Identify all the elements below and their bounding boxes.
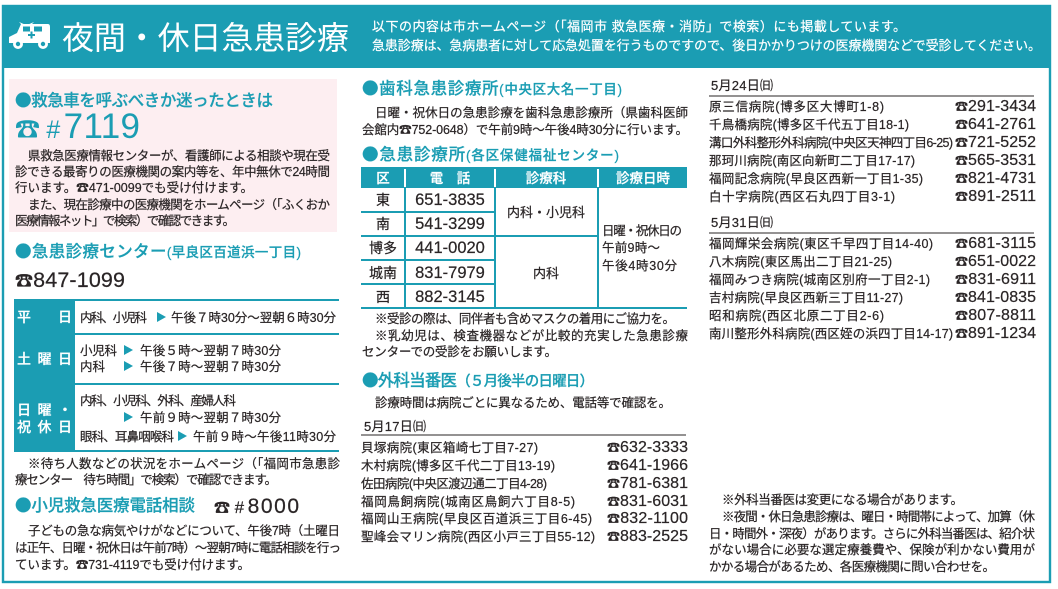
- header note: 急患診療は、急病患者に対して応急処置を行うものですので、後日かかりつけの医療機関などで受診してください。: [372, 38, 1041, 53]
- table rows: 内科: [533, 266, 559, 281]
- arrows: [124, 312, 187, 441]
- table header: [376, 170, 670, 186]
- list: May 31: ☎651-0022: [955, 253, 1036, 270]
- header note: [372, 19, 1041, 53]
- row text: 眼科、耳鼻咽喉科: [80, 429, 174, 444]
- list: May 24: ☎821-4731: [955, 170, 1036, 187]
- icon: ambulance: [9, 22, 50, 49]
- row text: 内科: [80, 360, 105, 374]
- list: May 31: 吉村病院(早良区西新三丁目11-27): [709, 290, 903, 305]
- list: May 24: ☎565-3531: [955, 152, 1036, 169]
- header note: 以下の内容は市ホームページ（「福岡市 救急医療・消防」で検索）にも掲載しています。: [372, 19, 906, 34]
- text block: pediatric: [15, 523, 341, 572]
- note: surgery caveats: ※夜間・休日急患診療は、曜日・時間帯によって、加算（休: [722, 509, 1035, 524]
- list: May 31: ☎891-1234: [955, 325, 1036, 342]
- list: May 17: ☎883-2525: [607, 528, 688, 545]
- note: waiting: 療センター 待ち時間」で検索）で確認できます。: [15, 472, 277, 487]
- heading: clinics: ●急患診療所(各区保健福祉センター): [362, 141, 619, 165]
- heading: emergency center: ●急患診療センター(早良区百道浜一丁目): [15, 238, 301, 262]
- note: surgery caveats: ※外科当番医は変更になる場合があります。: [722, 492, 963, 507]
- note: surgery caveats: がない場合に必要な選定療養費や、保険が利かない費用が: [709, 542, 1035, 557]
- list: May 31: 福岡輝栄会病院(東区千早四丁目14-40): [709, 236, 933, 251]
- list: May 31: 5月31日㈰: [711, 215, 773, 230]
- table rows: 651-3835: [415, 191, 485, 209]
- list: May 31: 昭和病院(西区北原二丁目2-6): [709, 309, 884, 323]
- heading: ambulance: ●救急車を呼ぶべきか迷ったときは: [15, 87, 273, 111]
- row text: 午後５時〜翌朝７時30分: [140, 344, 281, 358]
- row text: 午前９時〜翌朝７時30分: [140, 410, 281, 425]
- list: May 17: 5月17日㈰: [364, 419, 426, 434]
- note: waiting: ※待ち人数などの状況をホームページ（「福岡市急患診: [28, 456, 340, 471]
- table header: 電 話: [430, 171, 471, 186]
- table rows: 東: [376, 192, 390, 208]
- text: surgery note: 診療時間は病院ごとに異なるため、電話等で確認を。: [375, 395, 671, 410]
- list: May 17: 木村病院(博多区千代二丁目13-19): [361, 458, 555, 473]
- list: May 17: ☎832-1100: [607, 510, 688, 527]
- note: surgery caveats: かかる場合があるため、各医療機関に問い合わせを。: [709, 559, 995, 574]
- table rows: 博多: [369, 240, 397, 256]
- table header: 区: [376, 171, 390, 186]
- list: May 31: ☎841-0835: [955, 289, 1036, 306]
- table rows: 午前9時〜: [602, 240, 660, 255]
- list: May 24: ☎291-3434: [955, 98, 1036, 115]
- text block: dental: [362, 105, 688, 137]
- table rows: 西: [376, 289, 390, 305]
- row labels: 土曜日: [17, 351, 72, 367]
- text block: dental: 会館内☎752-0648）で午前9時〜午後4時30分に行います。: [362, 122, 688, 137]
- number: #7119: ☎ #7119: [15, 107, 140, 146]
- list: May 17: ☎831-6031: [607, 493, 688, 510]
- list: May 31: 南川整形外科病院(西区姪の浜四丁目14-17): [709, 326, 953, 341]
- list: May 24: ☎721-5252: [955, 134, 1036, 151]
- header band: [2, 5, 1051, 68]
- list: May 17: 聖峰会マリン病院(西区小戸三丁目55-12): [361, 530, 595, 544]
- note: surgery caveats: 日・時間外・深夜）があります。さらに外科当番医は、紹介状: [709, 526, 1035, 541]
- table header: 診療科: [526, 170, 567, 186]
- note: waiting: [15, 456, 340, 487]
- list: May 24: ☎891-2511: [955, 188, 1036, 205]
- heading: pediatric phone: ☎ #8000: [214, 495, 299, 518]
- list: May 24: 福岡記念病院(早良区西新一丁目1-35): [709, 171, 923, 186]
- list: May 24: 原三信病院(博多区大博町1-8): [709, 99, 884, 114]
- row text: 午後７時30分〜翌朝６時30分: [171, 311, 336, 325]
- table rows: 541-3299: [415, 215, 485, 233]
- text block: ambulance: 県救急医療情報センターが、看護師による相談や現在受: [28, 148, 330, 163]
- text block: pediatric: ています。☎731-4119でも受け付けます。: [15, 558, 250, 572]
- list: May 17: 貝塚病院(東区箱崎七丁目7-27): [361, 440, 538, 455]
- heading: dental: ●歯科急患診療所(中央区大名一丁目): [362, 75, 622, 99]
- list: May 17: 福岡山王病院(早良区百道浜三丁目6-45): [361, 511, 592, 526]
- text block: dental: 日曜・祝休日の急患診療を歯科急患診療所（県歯科医師: [375, 105, 688, 120]
- table rows: 441-0020: [415, 239, 485, 257]
- row text: 小児科: [80, 344, 117, 358]
- table rows: [369, 191, 682, 306]
- table: clinics: [361, 167, 687, 309]
- list: May 17: 佐田病院(中央区渡辺通二丁目4-28): [361, 476, 547, 491]
- text block: ambulance: 行います。☎471-0099でも受け付けます。: [15, 181, 253, 195]
- row text: 内科、小児科、外科、産婦人科: [80, 393, 236, 408]
- table: center hours: [14, 299, 339, 452]
- table rows: 内科・小児科: [507, 205, 585, 220]
- list: May 31: 八木病院(東区馬出二丁目21-25): [709, 255, 892, 269]
- note: clinics: ※受診の際は、同伴者も含めマスクの着用にご協力を。: [375, 311, 675, 326]
- panel: ambulance consultation: [9, 79, 337, 232]
- table rows: 城南: [369, 265, 397, 281]
- list: May 24: 白十字病院(西区石丸四丁目3-1): [709, 189, 895, 204]
- list: May 31: [709, 215, 1036, 342]
- table rows: 南: [376, 216, 390, 232]
- list: May 31: 福岡みつき病院(城南区別府一丁目2-1): [709, 272, 930, 287]
- row labels: 祝休日: [17, 419, 72, 435]
- text block: pediatric: 子どもの急な病気やけがなどについて、午後7時（土曜日: [28, 523, 340, 538]
- heading: pediatric phone: ●小児救急医療電話相談: [15, 492, 196, 516]
- row text: 内科、小児科: [80, 311, 147, 325]
- list: May 17: ☎641-1966: [607, 457, 688, 474]
- list: May 31: ☎831-6911: [955, 271, 1036, 288]
- list: May 17: ☎632-3333: [607, 439, 688, 456]
- list: May 24: 千鳥橋病院(博多区千代五丁目18-1): [709, 117, 909, 132]
- list: May 24: [709, 78, 1036, 205]
- row text: 午後７時〜翌朝７時30分: [140, 360, 281, 374]
- list: May 17: ☎781-6381: [607, 475, 688, 492]
- heading: surgery on duty: ●外科当番医（５月後半の日曜日）: [362, 367, 594, 391]
- row labels: 日曜・: [17, 402, 72, 418]
- phone: center: ☎847-1099: [15, 268, 125, 292]
- row labels: 平 日: [17, 309, 72, 325]
- list: May 17: 福岡鳥飼病院(城南区鳥飼六丁目8-5): [361, 494, 575, 509]
- row text: [80, 311, 336, 444]
- title: 夜間・休日急患診療: [62, 20, 349, 56]
- table rows: 日曜・祝休日の: [602, 224, 682, 238]
- list: May 31: ☎807-8811: [955, 307, 1036, 324]
- note: clinics: [362, 311, 688, 359]
- table rows: 午後4時30分: [602, 259, 677, 273]
- list: May 17: [361, 419, 688, 545]
- list: May 31: ☎681-3115: [955, 235, 1036, 252]
- text block: ambulance: 診できる最寄りの医療機関の案内等を、年中無休で24時間: [15, 164, 330, 179]
- heading: pediatric phone: [15, 492, 299, 518]
- note: clinics: ※乳幼児は、検査機器などが比較的充実した急患診療: [375, 328, 688, 343]
- text block: ambulance: また、現在診療中の医療機関をホームページ（「ふくおか: [28, 197, 330, 212]
- list: May 24: ☎641-2761: [955, 116, 1036, 133]
- row text: 午前９時〜午後11時30分: [193, 429, 336, 444]
- text block: ambulance: 医療情報ネット」で検索）で確認できます。: [15, 213, 235, 228]
- list: May 24: 5月24日㈰: [711, 78, 773, 93]
- text block: ambulance: [15, 148, 330, 228]
- row labels: [17, 309, 72, 435]
- note: surgery caveats: [709, 492, 1035, 574]
- table rows: 882-3145: [415, 288, 485, 306]
- note: clinics: センターでの受診をお願いします。: [362, 344, 557, 359]
- table rows: 831-7979: [415, 264, 485, 282]
- list: May 24: 那珂川病院(南区向新町二丁目17-17): [709, 153, 915, 168]
- table header: 診療日時: [616, 170, 670, 186]
- list: May 24: 溝口外科整形外科病院(中央区天神四丁目6-25): [709, 135, 953, 150]
- text block: pediatric: は正午、日曜・祝休日は午前7時）〜翌朝7時に電話相談を行っ: [15, 540, 341, 555]
